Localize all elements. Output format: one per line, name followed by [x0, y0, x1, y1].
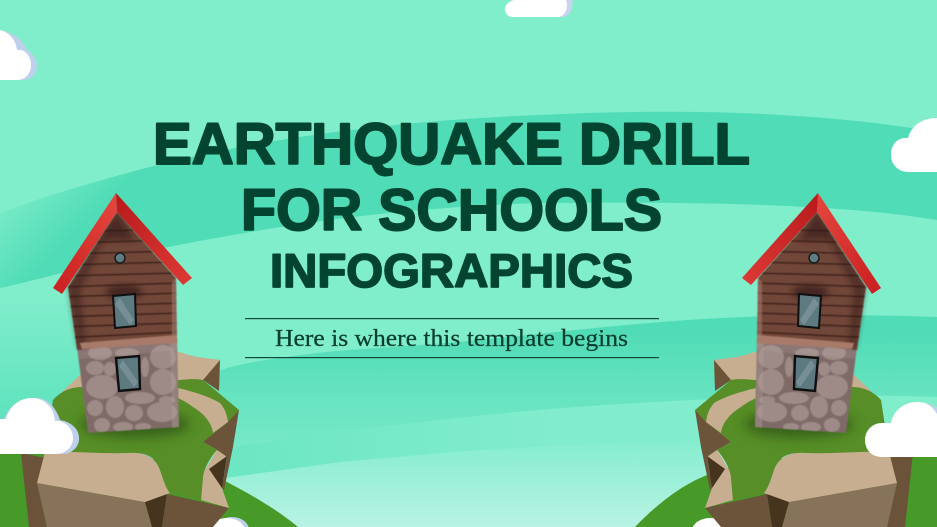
- house stone wall: [77, 338, 179, 433]
- subtitle top rule: [245, 318, 659, 319]
- house lower window: [116, 356, 140, 391]
- background wave: middle band: [225, 400, 720, 478]
- cloud: top centre: [505, 0, 573, 17]
- ground hill: right: [635, 454, 937, 527]
- house shadow: [80, 411, 190, 437]
- cloud: left lower: [0, 398, 79, 454]
- island winding path: [178, 388, 228, 433]
- island grass: [45, 379, 239, 500]
- island with house: left: [21, 193, 239, 527]
- background wave: bottom glow: [225, 440, 937, 527]
- title line 2: FOR SCHOOLS: [241, 178, 662, 243]
- house round window: [115, 253, 125, 263]
- ground hill: left: [0, 453, 298, 527]
- background wave: upper band: [0, 112, 937, 288]
- title line 3: INFOGRAPHICS: [270, 244, 633, 297]
- cloud: bottom right: [692, 518, 732, 527]
- title: [153, 112, 750, 297]
- background wave: lower band: [170, 315, 937, 450]
- house roof: [53, 193, 192, 294]
- cloud: bottom left: [209, 517, 249, 527]
- title line 1: EARTHQUAKE DRILL: [153, 112, 750, 177]
- house upper window: [113, 294, 136, 328]
- subtitle bottom rule: [245, 357, 659, 358]
- island with house: right: [695, 193, 913, 527]
- island front rock: [21, 410, 239, 527]
- island dark crack: [209, 456, 227, 488]
- cloud: right lower: [865, 402, 937, 457]
- island back rock: [62, 352, 220, 392]
- island right tan strip: [201, 450, 229, 508]
- house wood wall: [60, 212, 180, 350]
- background left fade: [0, 290, 175, 460]
- cloud: right upper: [891, 118, 937, 172]
- subtitle: Here is where this template begins: [275, 326, 628, 352]
- island tan ledge: [37, 451, 170, 502]
- cloud: top left: [0, 30, 37, 80]
